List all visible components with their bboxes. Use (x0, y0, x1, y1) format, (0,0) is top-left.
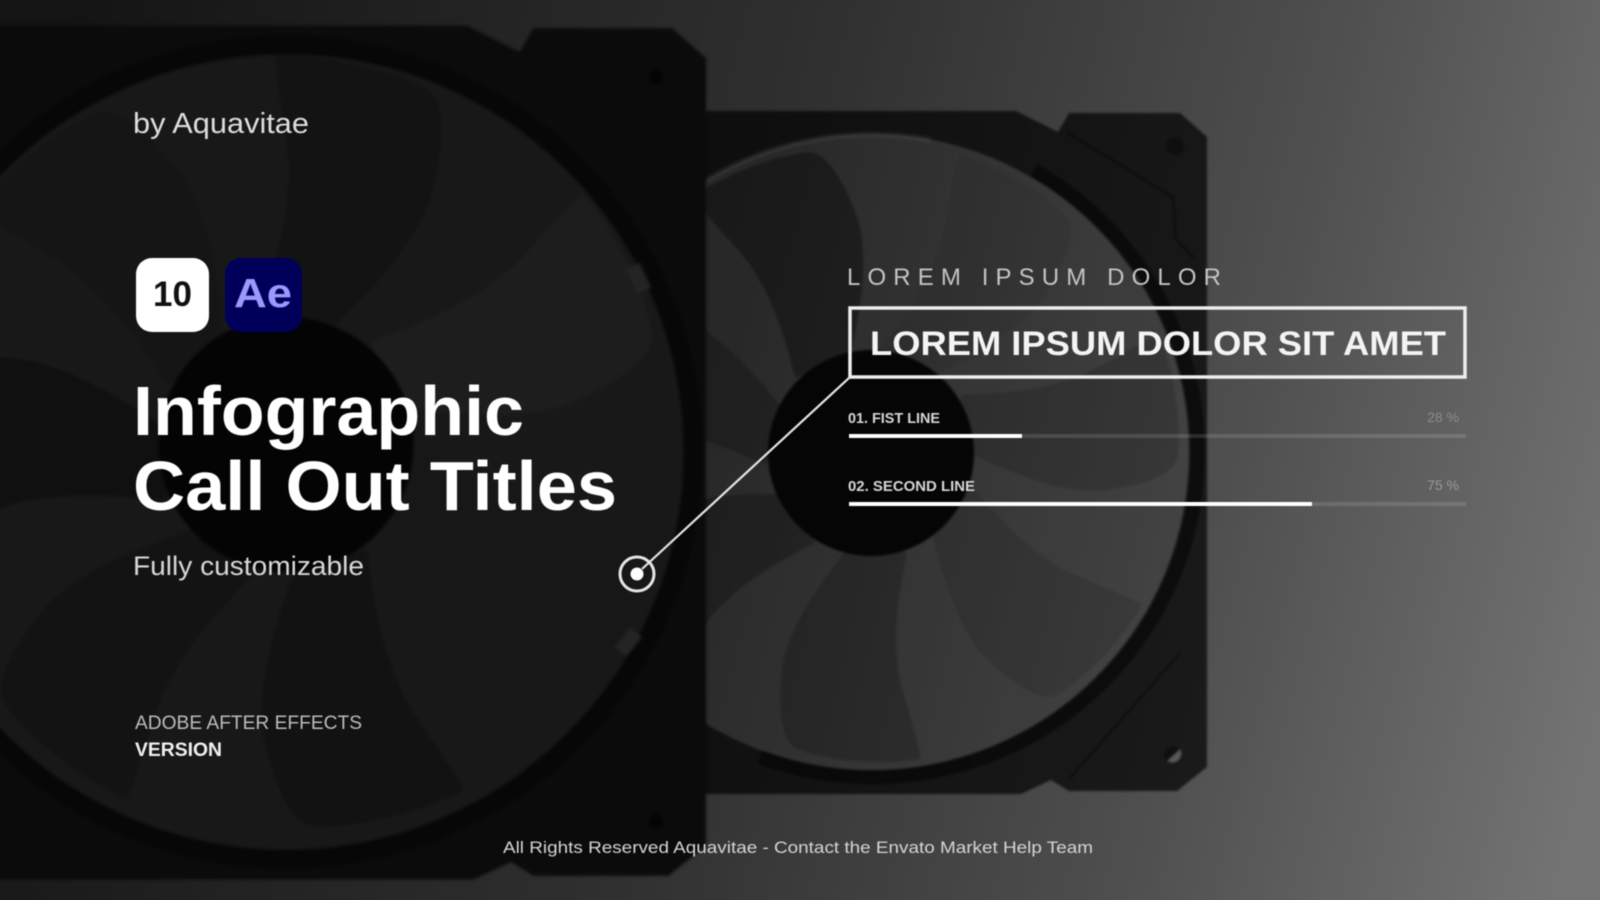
right fan illustration (526, 111, 1207, 794)
target ring (620, 557, 654, 591)
left fan illustration (0, 0, 789, 900)
subtitle: Fully customizable (133, 551, 364, 581)
right fan corner ridges (1066, 132, 1194, 779)
row 1 value: 28 % (1427, 409, 1459, 425)
row 2 fill (849, 502, 1312, 506)
right fan ring (760, 170, 1198, 777)
right fan frame (526, 111, 1207, 794)
box outline (850, 308, 1465, 377)
left fan blades (0, 0, 789, 900)
right fan screw holes (1164, 137, 1184, 764)
left fan hub (158, 317, 414, 572)
row 2 value: 75 % (1427, 477, 1459, 493)
title (133, 372, 617, 525)
left fan ring (0, 44, 694, 860)
right fan opening (553, 134, 1189, 770)
right fan hub (768, 350, 974, 556)
progress row 2 (848, 477, 1466, 506)
row 1 track (849, 434, 1466, 438)
row 2 label: 02. SECOND LINE (848, 478, 975, 495)
progress row 1 (848, 409, 1466, 438)
row 2 track (849, 502, 1466, 506)
badge: version 10: 10 (153, 275, 192, 314)
left fan ring clips (615, 263, 651, 656)
callout headline box (850, 308, 1465, 377)
left fan frame (0, 26, 706, 880)
callout leader line and target (620, 378, 849, 591)
leader line (642, 378, 849, 569)
badge: After Effects (225, 258, 302, 332)
target dot (630, 568, 644, 580)
right fan blades (558, 133, 1193, 762)
footer copyright: All Rights Reserved Aquavitae - Contact the Envato Market Help Team (503, 838, 1093, 857)
title line 2: Call Out Titles (133, 447, 617, 525)
left fan screw holes (648, 70, 664, 830)
badge: After Effects: Ae (234, 270, 292, 316)
badge: version 10 (136, 258, 209, 332)
left fan opening (0, 54, 684, 850)
title line 1: Infographic (133, 372, 524, 450)
by-line: by Aquavitae (133, 108, 309, 140)
version note line 2: VERSION (135, 740, 222, 761)
version note line 1: ADOBE AFTER EFFECTS (135, 713, 362, 734)
row 1 label: 01. FIST LINE (848, 410, 940, 427)
headline text: LOREM IPSUM DOLOR SIT AMET (870, 325, 1446, 363)
callout overline: LOREM IPSUM DOLOR (847, 264, 1221, 291)
row 1 fill (849, 434, 1022, 438)
right fan rim highlight (671, 134, 931, 205)
version note (135, 713, 362, 761)
